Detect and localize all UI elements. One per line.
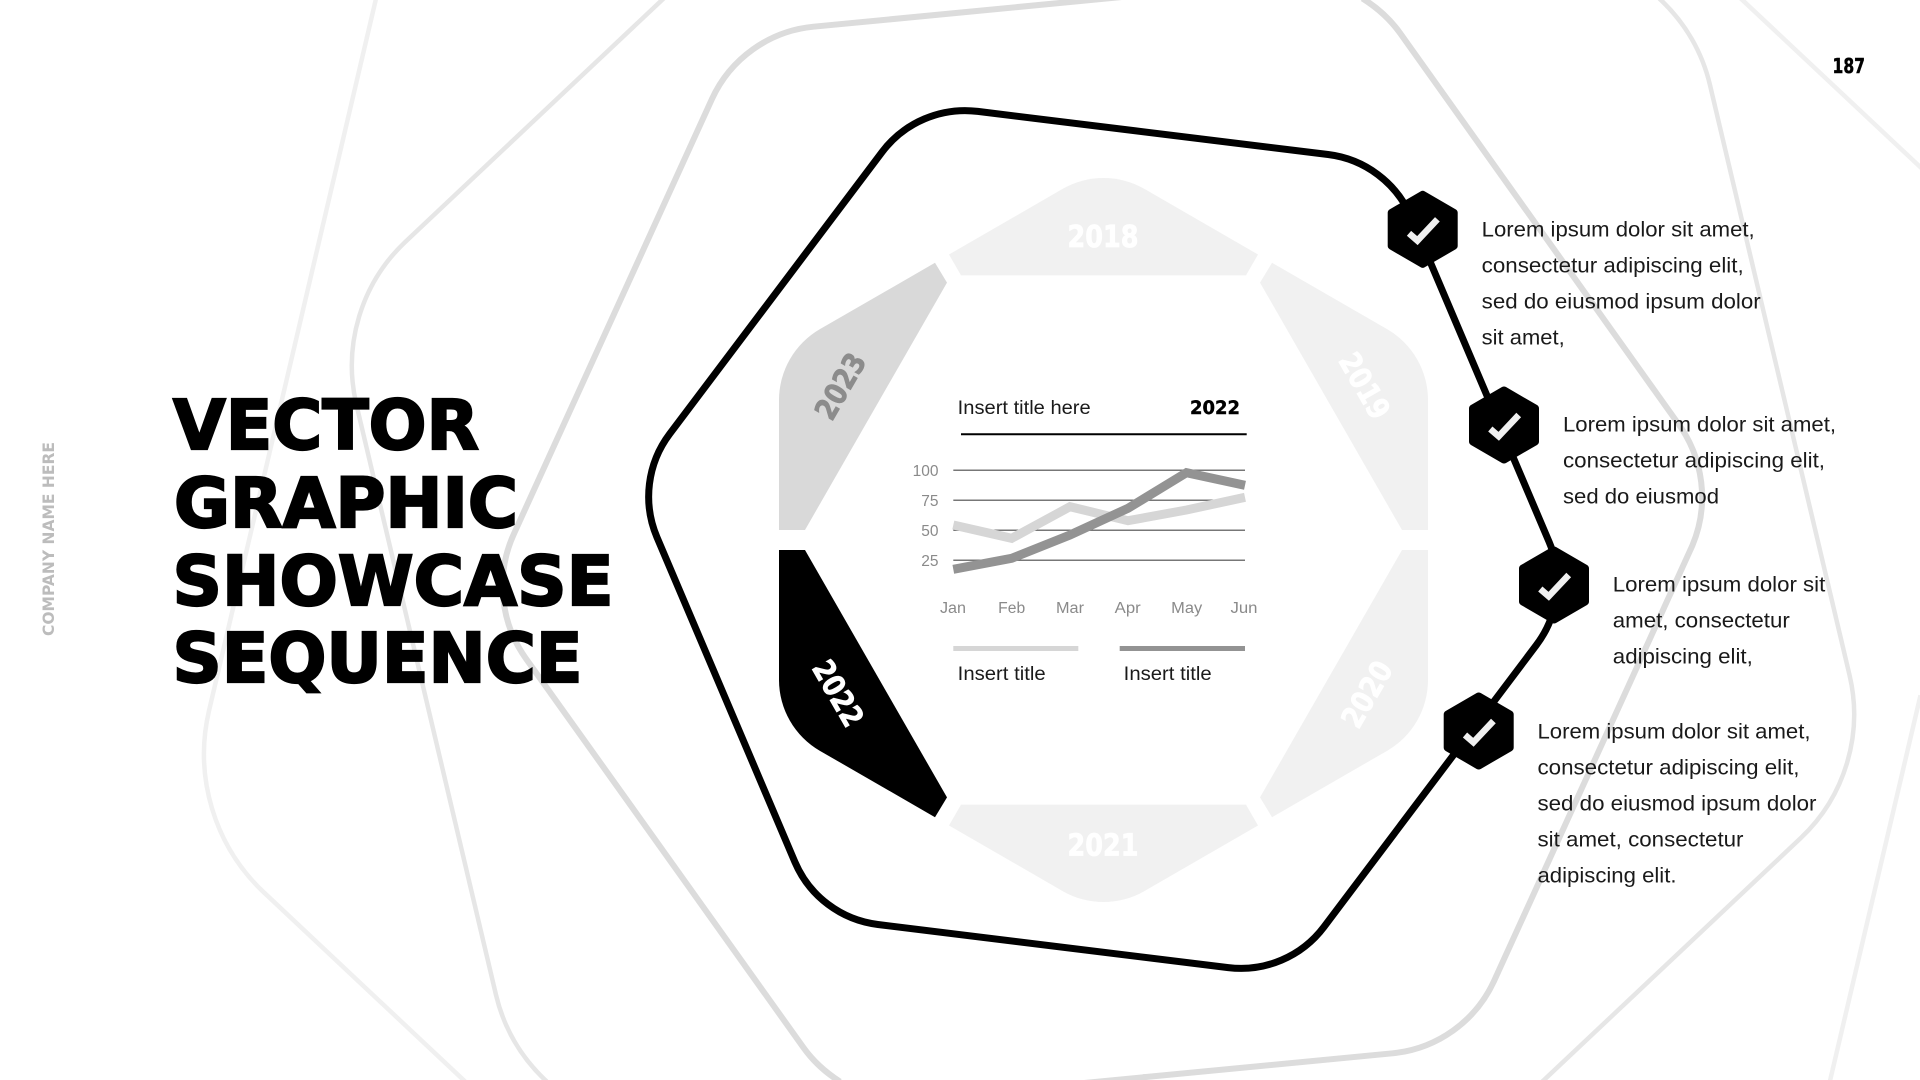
segment 2019: 2019: [1331, 347, 1397, 426]
text block 3: amet, consectetur: [1613, 610, 1790, 632]
check badge 3: [1523, 550, 1585, 620]
segment 2022 active: 2022: [804, 654, 870, 733]
line chart: Jan: [940, 600, 966, 617]
title: SHOWCASE: [172, 542, 614, 622]
text block 1: [1482, 218, 1761, 350]
text block 2: consectetur adipiscing elit,: [1563, 450, 1825, 472]
segment 2023: 2023: [808, 347, 874, 426]
segmented year hexagon: [779, 178, 1428, 902]
line chart: 25: [921, 553, 938, 570]
line chart: Jun: [1230, 600, 1258, 617]
check badge 4: [1448, 696, 1510, 766]
line chart: Mar: [1056, 600, 1084, 617]
check badge 2: [1473, 390, 1535, 460]
chart heading: Insert title here: [958, 398, 1091, 419]
line chart: [913, 463, 1258, 617]
text block 3: adipiscing elit,: [1613, 646, 1753, 668]
line chart: 50: [921, 523, 939, 540]
text block 1: consectetur adipiscing elit,: [1482, 254, 1744, 278]
segment 2020: [1260, 550, 1428, 817]
segment 2021: [949, 805, 1258, 902]
chart heading: [958, 398, 1247, 434]
segment 2022 active: [779, 550, 947, 817]
title: SEQUENCE: [172, 619, 582, 699]
text block 1: Lorem ipsum dolor sit amet,: [1482, 218, 1755, 242]
segment 2021: 2021: [1068, 828, 1138, 864]
text block 4: [1538, 720, 1816, 888]
title: GRAPHIC: [174, 464, 518, 544]
text block 4: sed do eiusmod ipsum dolor: [1538, 792, 1816, 816]
segment 2018: [949, 178, 1258, 275]
check badge 1: [1392, 195, 1454, 264]
segment 2019: [1260, 263, 1428, 530]
line chart: Feb: [998, 600, 1025, 617]
text block 1: sit amet,: [1482, 326, 1565, 350]
text block 4: Lorem ipsum dolor sit amet,: [1538, 720, 1810, 744]
title: [172, 386, 614, 699]
segment 2023: [779, 263, 947, 530]
text block 4: sit amet, consectetur: [1538, 828, 1744, 852]
legend: Insert title: [1124, 664, 1212, 685]
chart heading: 2022: [1190, 398, 1240, 419]
line chart: 100: [913, 463, 939, 480]
legend: Insert title: [958, 664, 1046, 685]
line chart: 75: [921, 493, 938, 510]
text block 2: [1563, 414, 1836, 508]
text block 3: [1613, 574, 1825, 668]
text block 4: consectetur adipiscing elit,: [1538, 756, 1800, 780]
title: VECTOR: [173, 386, 479, 466]
text block 1: sed do eiusmod ipsum dolor: [1482, 290, 1761, 314]
chart panel: [913, 398, 1258, 685]
text block 2: Lorem ipsum dolor sit amet,: [1563, 414, 1836, 436]
page number: 187: [1832, 54, 1865, 78]
black hexagon ring: [649, 111, 1557, 968]
line chart: Apr: [1115, 600, 1141, 617]
line chart: May: [1171, 600, 1202, 617]
text block 4: adipiscing elit.: [1538, 864, 1676, 888]
legend: [953, 646, 1245, 685]
text block 3: Lorem ipsum dolor sit: [1613, 574, 1825, 596]
text block 2: sed do eiusmod: [1563, 486, 1719, 508]
vertical company name: COMPANY NAME HERE: [39, 442, 58, 636]
segment 2020: 2020: [1335, 655, 1401, 734]
segment 2018: 2018: [1068, 220, 1138, 255]
